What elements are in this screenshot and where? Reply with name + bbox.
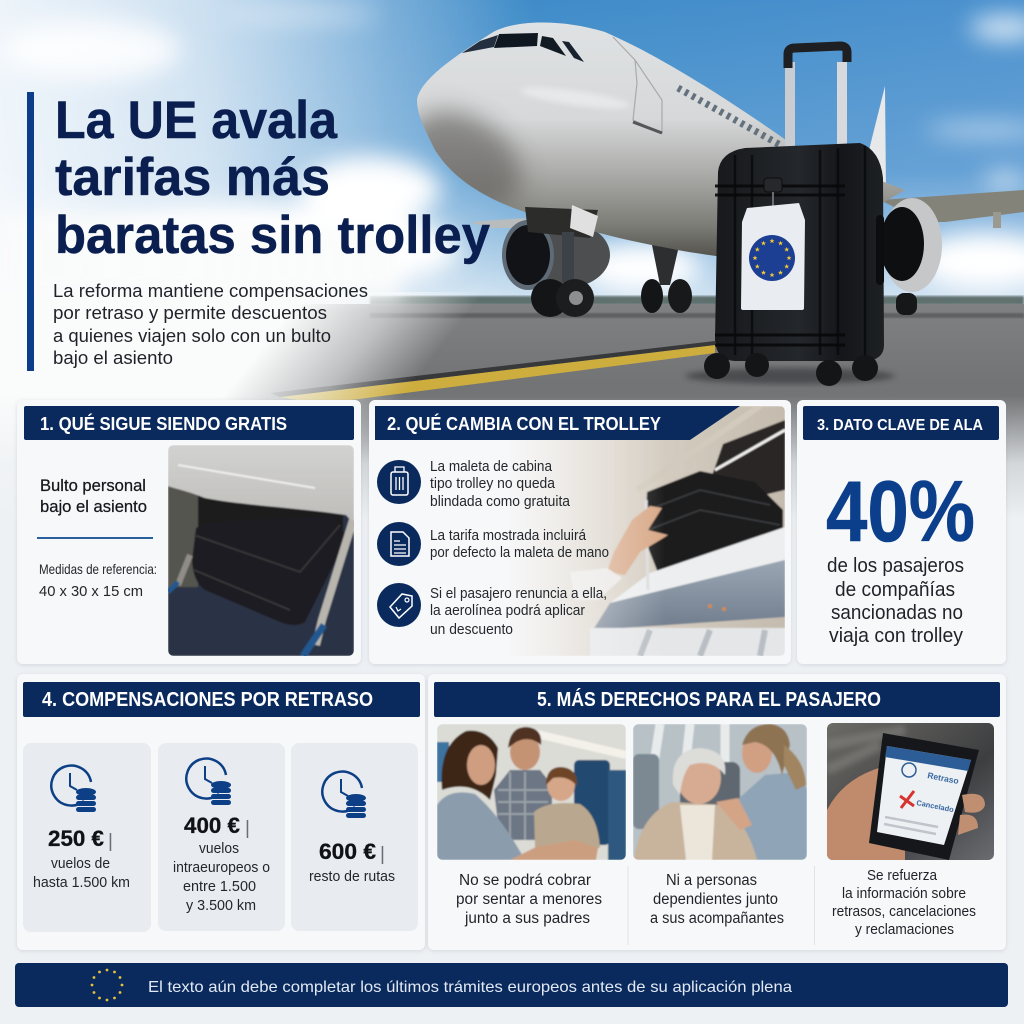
nose gear [525,207,598,238]
card: 600 euros: 600 € [319,839,376,864]
photo: family in the cabin [437,724,626,860]
panel 3: dato clave de ALA [797,400,1006,664]
photo: phone with flight alerts: Cancelado [916,798,955,814]
key figure description: de compañías [835,579,955,601]
bag label [40,476,147,516]
reference measurements [39,561,157,600]
caption: information: retrasos, cancelaciones [832,904,976,920]
card: 600 euros: | [380,844,385,865]
door [613,37,662,133]
photo: trolley in the overhead bin [530,406,785,656]
icon: document [377,522,421,566]
icon: clock and coins [51,766,96,812]
key figure description: viaja con trolley [829,625,963,647]
text: discount if waived: Si el pasajero renuncia a ella, [430,586,607,602]
hero photo: airplane and suitcase on the tarmac [0,0,1024,540]
panel 5: más derechos para el pasajero [428,674,1006,950]
cockpit windows [462,35,498,53]
photo: bag under the seat [168,445,354,656]
title: baratas sin trolley [55,206,490,265]
footer text: El texto aún debe completar los últimos trámites europeos antes de su aplicación plena [148,979,792,996]
panel 2 heading [375,406,740,440]
card: 400 euros [158,743,285,931]
main gear [652,245,678,285]
panel 1 heading: 1. QUÉ SIGUE SIENDO GRATIS [40,413,287,434]
subtitle: por retraso y permite descuentos [53,303,327,323]
caption: dependents: dependientes junto [653,891,778,908]
card: 400 euros: vuelos [199,841,239,857]
caption: information: Se refuerza [867,868,938,884]
left engine [546,232,610,284]
fuselage [417,22,905,262]
photo: elderly woman and companion [633,724,807,860]
bag label: Bulto personal [40,476,146,495]
panel 2: qué cambia con el trolley [369,400,791,664]
caption: dependents: Ni a personas [666,872,757,889]
cabin windows [678,88,782,146]
reference measurements: Medidas de referencia: [39,561,157,577]
caption: minors: por sentar a menores [456,891,602,908]
photo: phone with flight alerts: Retraso [927,770,960,786]
text: fare includes cabin bag: por defecto la maleta de mano [430,545,609,561]
panel 5 heading [434,682,1000,717]
caption: information [832,868,976,938]
subtitle: bajo el asiento [53,348,173,368]
card: 250 euros: 250 € [48,826,104,851]
card: 400 euros: 400 € [184,813,240,838]
icon: price tag [377,583,421,627]
text: discount if waived: un descuento [430,622,513,638]
card: 600 euros [291,743,418,931]
card: 400 euros: intraeuropeos o [173,860,270,876]
text: trolley no longer free: blindada como gratuita [430,494,571,510]
card: 250 euros [23,743,151,932]
panel 3 heading [803,406,999,440]
title: tarifas más [55,148,330,207]
panel 3 heading: 3. DATO CLAVE DE ALA [817,417,983,434]
key figure description: de los pasajeros [827,555,964,577]
caption: minors: No se podrá cobrar [459,872,591,889]
icon: suitcase [377,460,421,504]
panel 4: compensaciones por retraso [17,674,425,950]
caption: information: la información sobre [842,886,966,902]
icon: EU stars [91,969,123,1001]
panel 1 heading [24,406,354,440]
text: discount if waived: la aerolínea podrá aplicar [430,603,585,619]
subtitle: La reforma mantiene compensaciones [53,281,368,301]
card: 250 euros: | [108,831,113,852]
text: trolley no longer free: tipo trolley no queda [430,476,556,492]
panel 4 heading [23,682,420,717]
card: 400 euros: entre 1.500 [183,879,256,895]
card: 250 euros: hasta 1.500 km [33,875,130,891]
footer banner [15,963,1008,1007]
photo: phone with flight alerts [827,723,994,860]
suitcase [685,46,895,386]
subtitle: a quienes viajen solo con un bulto [53,326,331,346]
luggage tag with EU flag [741,203,805,310]
caption: dependents [650,872,784,927]
text: trolley no longer free [430,459,571,510]
text: fare includes cabin bag: La tarifa mostrada incluirá [430,528,587,544]
panel 4 heading: 4. COMPENSACIONES POR RETRASO [42,689,373,711]
caption: minors [456,872,602,927]
panel 5 heading: 5. MÁS DERECHOS PARA EL PASAJERO [537,688,881,711]
card: 400 euros: y 3.500 km [186,898,256,914]
bag label: bajo el asiento [40,497,147,516]
text: discount if waived [430,586,607,638]
reference measurements: 40 x 30 x 15 cm [39,583,143,600]
title [55,91,490,265]
panel 2 heading: 2. QUÉ CAMBIA CON EL TROLLEY [387,413,662,434]
key figure description [827,555,964,647]
caption: dependents: a sus acompañantes [650,910,784,927]
key figure description: sancionadas no [831,602,963,624]
card: 250 euros: vuelos de [51,856,110,872]
caption: minors: junto a sus padres [464,910,590,927]
title: La UE avala [55,91,338,150]
text: fare includes cabin bag [430,528,609,561]
panel 1: qué sigue siendo gratis [17,400,361,664]
caption: information: y reclamaciones [855,922,954,938]
icon: clock and coins [322,772,366,818]
card: 600 euros: resto de rutas [309,869,395,885]
right engine [882,198,942,292]
tail fin and far wing [869,86,886,190]
text: trolley no longer free: La maleta de cabina [430,459,553,475]
icon: clock and coins [186,759,231,805]
accent bar [27,92,34,371]
big number: 40% [826,464,975,560]
card: 400 euros: | [245,818,250,839]
subtitle [53,281,368,368]
